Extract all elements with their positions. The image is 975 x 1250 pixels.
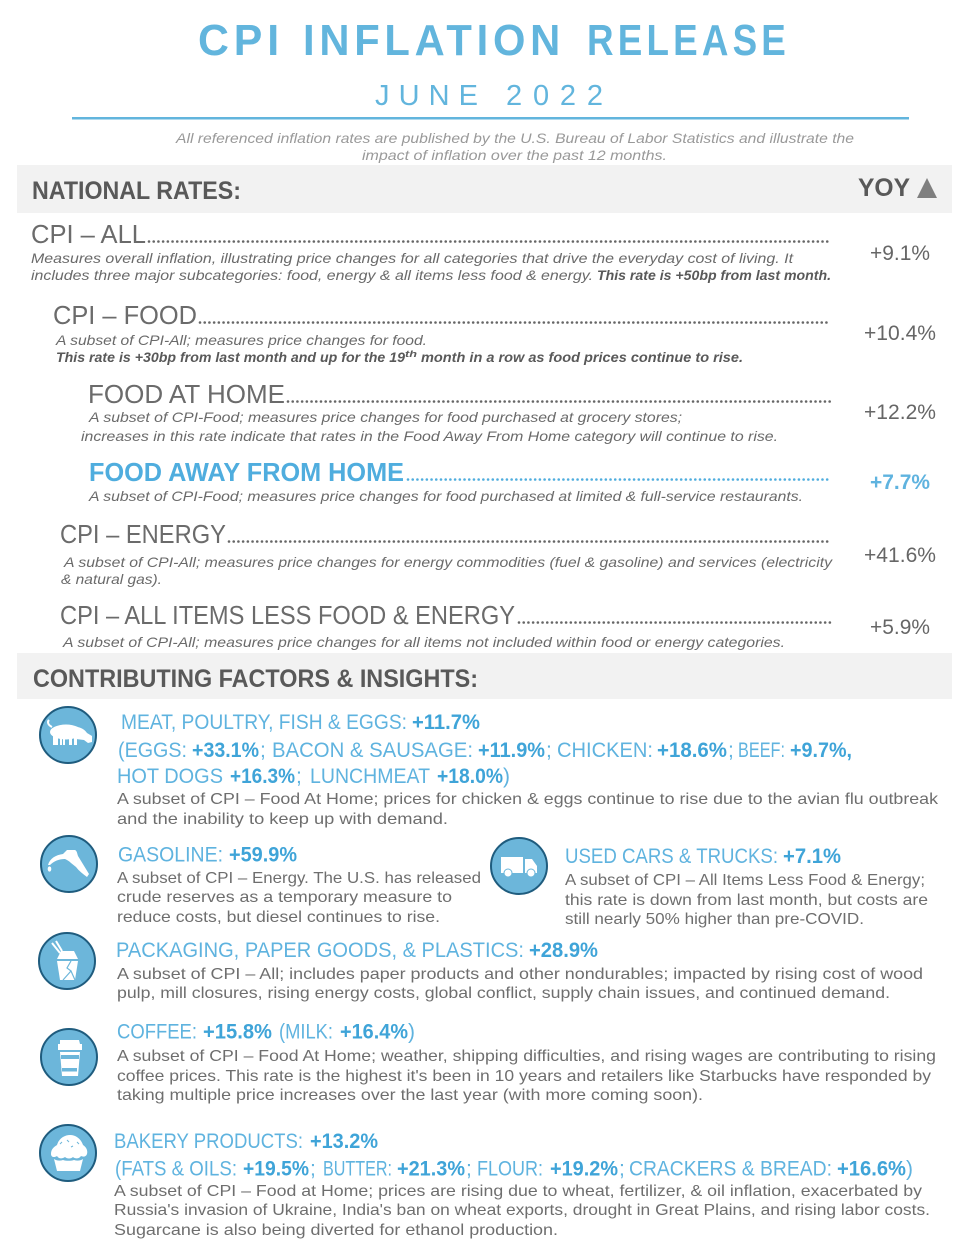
text: gasoline description: crude reserves as a temporary measure to <box>117 889 452 906</box>
heading: meat category: ; <box>296 765 302 788</box>
heading: bakery products: ) <box>906 1158 913 1180</box>
panel: coffee <box>41 1020 936 1104</box>
heading: coffee: +15.8% <box>203 1020 272 1044</box>
heading: meat category <box>117 711 852 788</box>
text: bakery description: A subset of CPI – Food at Home; prices are rising due to wheat, fertilizer, & oil inflation, exacerbated by <box>114 1183 922 1200</box>
heading: bakery products: +19.2% <box>550 1158 618 1180</box>
row: food at home: +12.2% <box>864 401 936 424</box>
panel: national rates list <box>31 219 936 650</box>
row: CPI all items less food and energy <box>60 600 930 650</box>
heading: bakery products: +16.6% <box>837 1158 906 1180</box>
text: gasoline description: reduce costs, but diesel continues to rise. <box>117 909 440 926</box>
heading: meat category: LUNCHMEAT <box>310 765 430 788</box>
heading: bakery products: BAKERY PRODUCTS: <box>114 1130 303 1153</box>
heading: gasoline <box>118 844 297 866</box>
heading: bakery products: +21.3% <box>397 1158 465 1180</box>
heading: meat category: ; <box>728 739 734 762</box>
heading: coffee: ) <box>408 1020 415 1044</box>
row: CPI food <box>53 300 936 365</box>
heading: packaging: PACKAGING, PAPER GOODS, & PLASTICS: <box>116 939 524 962</box>
heading: coffee: (MILK: <box>279 1020 333 1044</box>
heading: national rates: NATIONAL RATES: <box>32 177 241 205</box>
row: CPI energy: & natural gas). <box>61 571 162 587</box>
row: CPI all items less food and energy: +5.9% <box>870 616 930 639</box>
heading: coffee: +16.4% <box>340 1020 408 1044</box>
text: packaging description: A subset of CPI – All; includes paper products and other nondurables; impacted by rising cost of wood <box>117 966 923 983</box>
heading: meat category: BEEF: <box>738 739 785 762</box>
panel: bakery products <box>40 1125 930 1239</box>
row: CPI food: CPI – FOOD <box>53 300 197 330</box>
row: CPI all items less food and energy: CPI – ALL ITEMS LESS FOOD & ENERGY <box>60 600 515 630</box>
row: food at home: A subset of CPI-Food; measures price changes for food purchased at grocery stores; <box>88 409 682 425</box>
icon: truck <box>491 838 547 894</box>
row: CPI food: A subset of CPI-All; measures price changes for food. <box>55 332 427 348</box>
text: coffee description: coffee prices. This rate is the highest it's been in 10 years and retailers like Starbucks have responded by <box>117 1068 931 1085</box>
heading: bakery products: ; <box>619 1158 625 1180</box>
title <box>198 16 790 65</box>
heading: meat category: CHICKEN: <box>557 739 653 762</box>
text: used cars description: A subset of CPI – All Items Less Food & Energy; <box>565 872 925 889</box>
icon: up triangle <box>917 178 937 198</box>
subtitle: date: 2022 <box>506 80 603 112</box>
text: meat description: and the inability to keep up with demand. <box>117 811 448 828</box>
heading: bakery products: ; <box>310 1158 316 1180</box>
row: CPI all: This rate is +50bp from last month. <box>597 267 831 283</box>
text: packaging description: pulp, mill closures, rising energy costs, global conflict, supply chain issues, and continued demand. <box>117 985 890 1002</box>
title: RELEASE <box>587 16 790 65</box>
text: used cars description: this rate is down from last month, but costs are <box>565 892 928 909</box>
heading: meat category: +11.7% <box>412 711 480 734</box>
row: CPI food: This rate is +30bp from last month and up for the 19 <box>56 349 405 365</box>
source note: All referenced inflation rates are published by the U.S. Bureau of Labor Statistics and illustrate the <box>175 130 854 146</box>
subtitle: date <box>375 80 603 112</box>
row: CPI food: th <box>405 349 418 359</box>
panel: used cars and trucks <box>491 838 928 928</box>
heading: meat category: BACON & SAUSAGE: <box>272 739 473 762</box>
heading: meat category: ; <box>546 739 552 762</box>
row: food away from home <box>88 457 930 504</box>
heading: meat category: ; <box>260 739 266 762</box>
heading: bakery products: BUTTER: <box>323 1158 392 1180</box>
heading: meat category: +33.1% <box>192 739 259 762</box>
text: packaging description <box>117 966 923 1002</box>
heading: bakery products: ; <box>466 1158 472 1180</box>
source note: impact of inflation over the past 12 months. <box>362 147 667 163</box>
text: coffee description: taking multiple price increases over the last year (with more coming soon). <box>117 1087 703 1104</box>
panel: meat, poultry, fish and eggs <box>40 707 939 828</box>
heading: bakery products <box>114 1130 913 1180</box>
heading: meat category: MEAT, POULTRY, FISH & EGGS: <box>121 711 407 734</box>
row: CPI energy: +41.6% <box>864 544 936 567</box>
heading: used cars: USED CARS & TRUCKS: <box>565 845 778 868</box>
heading: meat category: ) <box>503 765 510 788</box>
row: food at home: increases in this rate indicate that rates in the Food Away From Home category will continue to rise. <box>81 428 778 444</box>
heading: bakery products: +19.5% <box>243 1158 309 1180</box>
text: used cars description <box>565 872 928 928</box>
icon: pig <box>40 707 96 763</box>
row: food at home: FOOD AT HOME <box>88 379 285 409</box>
icon: coffee cup <box>41 1029 97 1085</box>
heading: meat category: +18.0% <box>437 765 503 788</box>
row: CPI all: CPI – ALL <box>31 219 146 249</box>
heading: meat category: HOT DOGS <box>117 765 223 788</box>
heading: meat category: +11.9% <box>478 739 545 762</box>
heading: year over year: YOY <box>858 174 910 202</box>
text: meat description: A subset of CPI – Food At Home; prices for chicken & eggs continue to rise due to the avian flu outbreak <box>117 791 939 808</box>
subtitle: date: JUNE <box>375 80 478 112</box>
panel: gasoline <box>41 836 481 926</box>
text: meat description <box>117 791 939 828</box>
row: CPI all: includes three major subcategories: food, energy & all items less food & energy. <box>31 267 593 283</box>
row: food away from home: FOOD AWAY FROM HOME <box>89 457 404 487</box>
row: food away from home: +7.7% <box>870 471 930 494</box>
text: used cars description: still nearly 50% higher than pre-COVID. <box>565 911 864 928</box>
row: CPI all items less food and energy: A subset of CPI-All; measures price changes for all items not included within food or energy categories. <box>62 634 785 650</box>
row: CPI energy: CPI – ENERGY <box>60 519 226 549</box>
text: bakery description: Russia's invasion of Ukraine, India's ban on wheat exports, drought in Great Plains, and rising labor costs. <box>114 1202 930 1219</box>
heading: meat category: +16.3% <box>230 765 295 788</box>
heading: bakery products: FLOUR: <box>477 1158 543 1180</box>
heading: bakery products: (FATS & OILS: <box>115 1158 237 1180</box>
panel: packaging <box>39 933 923 1002</box>
row: CPI all: +9.1% <box>870 242 930 265</box>
icon: muffin <box>40 1125 96 1181</box>
heading: meat category: +9.7%, <box>790 739 852 762</box>
row: CPI all <box>31 219 930 283</box>
row: CPI energy: A subset of CPI-All; measures price changes for energy commodities (fuel & gasoline) and services (electricity <box>63 554 833 570</box>
text: gasoline description <box>117 870 481 926</box>
title: INFLATION <box>303 16 565 65</box>
text: coffee description: A subset of CPI – Food At Home; weather, shipping difficulties, and rising wages are contributing to rising <box>117 1048 936 1065</box>
panel: national rates header <box>17 165 952 213</box>
row: food at home <box>81 379 936 444</box>
title: CPI <box>198 16 284 65</box>
heading: meat category: (EGGS: <box>118 739 187 762</box>
row: food away from home: A subset of CPI-Food; measures price changes for food purchased at limited & full-service restaurants. <box>88 488 803 504</box>
text: bakery description <box>114 1183 930 1239</box>
icon: gas nozzle <box>41 836 97 892</box>
heading: packaging: +28.9% <box>529 939 598 962</box>
heading: bakery products: CRACKERS & BREAD: <box>629 1158 832 1180</box>
heading: coffee <box>117 1020 415 1044</box>
text: gasoline description: A subset of CPI – Energy. The U.S. has released <box>117 870 481 887</box>
heading: contributing factors: CONTRIBUTING FACTORS & INSIGHTS: <box>33 665 478 693</box>
heading: gasoline: +59.9% <box>229 844 297 866</box>
heading: gasoline: GASOLINE: <box>118 844 223 866</box>
row: CPI food: month in a row as food prices continue to rise. <box>421 349 743 365</box>
heading: bakery products: +13.2% <box>310 1130 378 1153</box>
heading: used cars: +7.1% <box>783 845 841 868</box>
heading: coffee: COFFEE: <box>117 1020 197 1044</box>
text: coffee description <box>117 1048 936 1104</box>
row: CPI food: +10.4% <box>864 322 936 345</box>
source note <box>175 130 854 163</box>
text: bakery description: Sugarcane is also being diverted for ethanol production. <box>114 1222 558 1239</box>
row: CPI energy <box>60 519 936 587</box>
row: CPI all: Measures overall inflation, illustrating price changes for all categories that drive the everyday cost of living. It <box>31 250 794 266</box>
heading: meat category: +18.6% <box>657 739 727 762</box>
panel: contributing factors header <box>17 653 952 699</box>
icon: takeout box <box>39 933 95 989</box>
